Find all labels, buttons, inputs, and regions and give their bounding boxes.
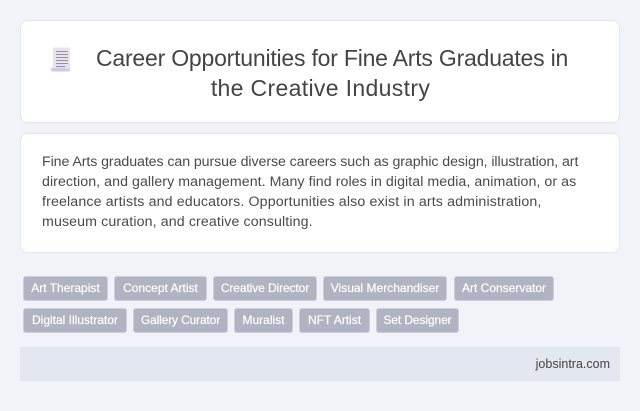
tag: Visual Merchandiser	[331, 281, 439, 295]
tag	[23, 308, 127, 333]
footer text: jobsintra.com	[536, 357, 610, 371]
text: description: freelance artists and educators. Opportunities also exist in arts administration,	[42, 194, 541, 210]
tag	[376, 308, 459, 333]
tag	[299, 308, 370, 333]
tag	[454, 276, 554, 301]
tag: Muralist	[242, 313, 284, 327]
tag: Concept Artist	[123, 281, 198, 295]
tag: Set Designer	[383, 313, 452, 327]
tag: Art Conservator	[462, 281, 546, 295]
heading: title line 2: the Creative Industry	[211, 75, 430, 101]
text: description: direction, and gallery management. Many find roles in digital media, animation, or as	[42, 174, 576, 190]
panel: description card	[20, 133, 620, 253]
tag: Art Therapist	[31, 281, 100, 295]
tags row 2	[23, 308, 459, 333]
tag: Digital Illustrator	[32, 313, 118, 327]
footer bar	[20, 347, 620, 381]
tag	[234, 308, 293, 333]
tags row 1	[23, 276, 554, 301]
text: description	[42, 154, 578, 230]
tag: NFT Artist	[308, 313, 361, 327]
tag	[323, 276, 447, 301]
panel: title card	[20, 20, 620, 123]
tag	[114, 276, 207, 301]
heading: title line 1: Career Opportunities for Fine Arts Graduates in	[96, 45, 568, 71]
text: description: Fine Arts graduates can pursue diverse careers such as graphic design, illustration, art	[42, 154, 578, 170]
text: description: museum curation, and creative consulting.	[42, 214, 313, 230]
icon: document scroll	[51, 48, 70, 72]
tag	[133, 308, 228, 333]
tag: Gallery Curator	[141, 313, 220, 327]
tag	[23, 276, 108, 301]
tag	[213, 276, 317, 301]
tag: Creative Director	[221, 281, 309, 295]
